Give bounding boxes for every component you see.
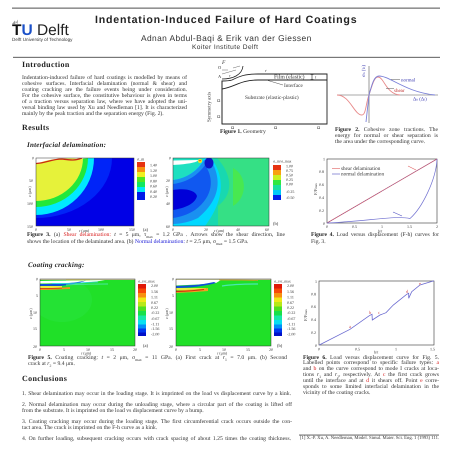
figure 6: load versus displacement chart (303, 279, 435, 354)
figure 5b: second crack contour: z (μm) (164, 308, 169, 319)
caption: figure 6 (303, 354, 439, 396)
figure 3b: normal delamination contour: 40 (166, 201, 170, 206)
figure 3a: shear delamination contour: 100 (98, 227, 104, 232)
title: Indentation-Induced Failure of Hard Coatings (95, 14, 357, 26)
text block: introduction: cohesive surfaces. Interfacial delamination (normal & shear) and (22, 81, 187, 87)
figure 5a: coating cracking contour: 20 (133, 347, 137, 352)
colorbar: figure 5b: 1.56 (287, 289, 294, 294)
colorbar: figure 5a: -1.11 (151, 322, 159, 326)
colorbar: figure 3a: 1.00 (150, 173, 157, 178)
figure 5b: second crack contour: 10 (169, 310, 173, 315)
figure 3b: normal delamination contour: 40 (236, 227, 240, 232)
figure 6: load versus displacement chart: b (369, 310, 372, 315)
figure 5a: coating cracking contour: (a) (143, 343, 148, 348)
figure 6: load versus displacement chart: 0.4 (311, 317, 316, 322)
caption: figure 4: Figure 4. Load versus displacement (F-h) curves for (311, 232, 439, 238)
figure 3a: shear delamination contour: z (μm) (27, 186, 32, 197)
colorbar: figure 3a: 0.20 (150, 194, 157, 199)
figure 5a: coating cracking contour: 10 (33, 310, 37, 315)
text block: conclusions: 1. Shear delamination may occur in the loading stage. It is imprinted on the load vs displacement curve by a kink. (22, 391, 291, 397)
figure 4: load versus displacement chart: 1 (323, 156, 325, 162)
caption: figure 5: crack at r2 = 9.4 μm. (28, 361, 75, 368)
caption: figure 1: Figure 1. Geometry (220, 129, 266, 135)
colorbar: figure 5a: 2.00 (151, 283, 158, 288)
colorbar: figure 3b: 0.75 (286, 168, 293, 173)
figure 3a: shear delamination contour: 150 (27, 224, 33, 229)
figure 2: cohesive zone tractions chart: Δn (Δt) (413, 96, 427, 102)
figure 3a: shear delamination contour: 0 (32, 156, 34, 160)
figure 3b: normal delamination contour: 60 (166, 224, 170, 229)
caption: figure 3 (27, 232, 285, 246)
figure 5a: coating cracking contour: 0 (36, 276, 38, 282)
figure 5a: coating cracking contour: r (μm) (81, 350, 92, 356)
figure 3b: normal delamination contour: 0 (169, 156, 171, 160)
figure 6: load versus displacement chart: 1.5 (430, 346, 435, 352)
figure 6: load versus displacement chart: d (406, 289, 409, 294)
colorbar: figure 3a: 0.60 (150, 184, 157, 188)
figure 3a: shear delamination contour: 50 (29, 178, 33, 183)
figure 6: load versus displacement chart: 0.5 (355, 346, 360, 352)
figure 6: load versus displacement chart: 0 (315, 343, 317, 348)
figure 5b: second crack contour: 20 (269, 347, 273, 352)
text block: introduction: For the cohesive surface, the constitutive behaviour is given in terms (22, 93, 187, 99)
text block: introduction: of a traction versus separation law, where we have adopted the uni- (22, 99, 187, 105)
caption: figure 6: tions r1 and r2, respectively. At c the first crack grows (303, 372, 439, 379)
figure 1: geometry: Ω (317, 125, 320, 130)
icon: TU Delft flame (12, 20, 18, 24)
caption: figure 6: Figure 6. Load versus displacement curve for Fig. 5. (303, 354, 439, 360)
caption: figure 3: Figure 3. (a) Shear delamination: t = 5 μm, τmax = 1.2 GPa . Arrows show the shear direction, line (27, 232, 285, 239)
caption: figure 4: Fig. 3. (311, 238, 326, 244)
figure 5b: second crack contour: 5 (172, 293, 174, 298)
figure 3b: normal delamination contour (164, 156, 279, 233)
figure 5b: second crack contour: (b) (277, 343, 283, 348)
reference: [1] X.-P. Xu, A. Needleman, Model. Simul. Mater. Sci. Eng. 1 (1993) 111. (300, 436, 439, 441)
colorbar: figure 5a: 0.67 (151, 300, 158, 305)
references rule (299, 434, 439, 436)
figure 4: load versus displacement chart: 1.5 (407, 224, 412, 229)
figure 6: load versus displacement chart: 1 (395, 346, 397, 352)
colorbar: figure 5b: 0.22 (287, 305, 294, 310)
figure 1: geometry: Interface (284, 83, 303, 89)
figure 6: load versus displacement chart: 0 (318, 346, 320, 352)
figure 3b: normal delamination contour: 20 (204, 227, 208, 232)
heading: Results: Results (22, 123, 49, 132)
caption: figure 2: Figure 2. Cohesive zone tractions. The (335, 126, 438, 132)
figure 4: load versus displacement chart: 0.2 (319, 208, 324, 213)
colorbar: figure 3a: 0.40 (150, 189, 157, 194)
figure 5b: second crack contour: 20 (169, 344, 173, 349)
figure 5a: coating cracking contour: 10 (86, 347, 90, 352)
colorbar: figure 5a: σ_r/σ_max (138, 280, 155, 284)
colorbar: figure 3a: σ_m (137, 156, 145, 162)
figure 4: load versus displacement chart: 2 (436, 224, 438, 229)
figure 1: geometry: Ω (217, 98, 221, 103)
colorbar: figure 3b (273, 160, 294, 200)
colorbar: figure 3a: 1.40 (150, 162, 157, 168)
figure 1: geometry: r (265, 68, 267, 73)
figure 1: geometry: Substrate (elastic-plastic) (245, 95, 299, 101)
text block: conclusions: 2. Normal delamination may occur during the unloading stage, where a circular part of the coating is lifted off (22, 402, 292, 408)
figure 6: load versus displacement chart: a (349, 324, 351, 329)
figure 1: geometry: t (315, 75, 317, 80)
caption: figure 4 (311, 232, 439, 244)
figure 3b: normal delamination contour: 0 (172, 227, 174, 232)
colorbar: figure 3a: 0.80 (150, 178, 157, 184)
figure 6: load versus displacement chart: 1 (315, 279, 317, 284)
figure 5a: coating cracking contour: 20 (33, 344, 37, 349)
colorbar: figure 5b: -1.56 (287, 326, 295, 331)
colorbar: figure 3b: 0.50 (286, 172, 293, 178)
figure 1: geometry: O (218, 65, 222, 70)
figure 5b: second crack contour: 10 (222, 347, 226, 352)
text block: conclusions: 3. Coating cracking may occur during the loading stage. The first circumferential crack occurs outside the con- (22, 418, 292, 424)
figure 6: load versus displacement chart: 0.6 (311, 304, 316, 309)
colorbar: figure 5a: -1.56 (151, 326, 159, 331)
figure 3a: shear delamination contour (27, 156, 148, 233)
figure 4: load versus displacement chart: F/Fmax (313, 183, 318, 195)
text block: introduction: mainly by the peak traction and the separation energy (Fig. 2). (22, 111, 164, 117)
colorbar: figure 5b: -1.11 (287, 322, 295, 326)
colorbar: figure 5b: -0.67 (287, 316, 295, 321)
figure 2: cohesive zone tractions chart: σn (τt) (361, 65, 367, 77)
figure 3a: shear delamination contour: 0 (35, 227, 37, 232)
colorbar: figure 3b: -0.50 (286, 195, 294, 200)
figure 5b: second crack contour (164, 276, 283, 356)
colorbar: figure 5a: -0.22 (151, 310, 159, 315)
figure 5a: coating cracking contour: 0 (39, 347, 41, 352)
figure 5b: second crack contour: 15 (169, 326, 173, 331)
colorbar: figure 5b: σ_r/σ_max (274, 280, 291, 284)
text block: conclusions: from the substrate. It is imprinted on the load vs displacement curve by a bump. (22, 408, 204, 414)
caption: figure 5 (28, 354, 287, 368)
figure 5a: coating cracking contour: 5 (36, 293, 38, 298)
figure 5a: coating cracking contour: z (μm) (28, 308, 33, 319)
colorbar: figure 5a (138, 280, 159, 336)
text block: conclusions: tact area. The crack is imprinted on the F-h curve as a kink. (22, 424, 157, 430)
text block: introduction: coating cracking are the failure events being under consideration. (22, 87, 187, 93)
figure 5a: coating cracking contour (28, 276, 148, 356)
caption: figure 6: and b on the curve correspond to mode I cracks at loca- (303, 366, 439, 372)
figure 6: load versus displacement chart: 0.8 (311, 292, 316, 296)
colorbar: figure 5b: -0.22 (287, 310, 295, 315)
colorbar: figure 5a: 1.56 (151, 289, 158, 294)
colorbar: figure 5a: 0.22 (151, 305, 158, 310)
figure 5a: coating cracking contour: 5 (63, 347, 65, 352)
figure 2: cohesive zone tractions chart (337, 65, 438, 123)
figure 1: geometry: A (218, 74, 222, 79)
colorbar: figure 5a: -0.67 (151, 316, 159, 321)
figure 2: cohesive zone tractions chart: shear (394, 88, 405, 94)
figure 1: geometry: Film (elastic) (274, 75, 305, 81)
figure 1: geometry: r (229, 73, 231, 78)
figure 4: load versus displacement chart: 0 (326, 224, 328, 229)
figure 5a: coating cracking contour: 15 (33, 326, 37, 331)
figure 3b: normal delamination contour: r (μm) (214, 228, 225, 233)
caption: figure 2 (335, 126, 438, 144)
figure 4: load versus displacement chart: 0.6 (319, 182, 324, 187)
figure 4: load versus displacement chart: h/t (378, 228, 383, 234)
colorbar: figure 5b: 0.67 (287, 300, 294, 305)
subheading: coating cracking: Coating cracking: (28, 261, 85, 269)
figure 3a: shear delamination contour: 150 (129, 227, 135, 232)
figure 2: cohesive zone tractions chart: normal (401, 78, 416, 84)
colorbar: figure 3b: 1.00 (286, 164, 293, 168)
figure 5a: coating cracking contour: 15 (110, 347, 114, 352)
caption: figure 3: shows the location of the delaminated area. (b) Normal delamination: t = 2.5 μm, σmax = 1.5 GPa. (27, 238, 248, 246)
institute: Koiter Institute Delft (192, 44, 258, 51)
figure 1: geometry: Ω (231, 125, 234, 130)
figure 1: geometry: Ω (274, 125, 277, 130)
caption: figure 6: Labelled points correspond to specific failure types: a (303, 360, 439, 366)
text block: conclusions (22, 391, 292, 442)
heading: Conclusions: Conclusions (22, 374, 67, 383)
caption: figure 5: Figure 5. Coating cracking: t = 2 μm, σmax = 11 GPa. (a) First crack at r1 = 7.0 μm. (b) Second (28, 354, 287, 362)
subheading: interfacial delamination: Interfacial delamination: (27, 141, 106, 149)
colorbar: figure 3b: 0.25 (286, 177, 293, 182)
figure 1: geometry: Symmetry axis (206, 92, 212, 122)
colorbar: figure 5b: 1.11 (287, 294, 294, 300)
caption: figure 2: energy for normal or shear separation is (335, 132, 438, 138)
figure 1: geometry: F (221, 60, 226, 66)
colorbar: figure 3a: 1.20 (150, 168, 157, 173)
colorbar: figure 5a: -2.00 (151, 332, 159, 336)
figure 5b: second crack contour: 0 (172, 276, 174, 282)
text block: conclusions: 4. On further loading, subsequent cracking occurs with crack spacing of about 1.25 times the coating thickness. (22, 436, 291, 442)
caption: figure 6: vicinity of the coating cracks. (303, 390, 370, 396)
figure 3a: shear delamination contour: 100 (27, 201, 33, 206)
figure 4: load versus displacement chart (313, 156, 438, 234)
colorbar: figure 5b: 2.00 (287, 283, 294, 288)
colorbar: figure 3b: -0.25 (286, 189, 294, 194)
figure 4: load versus displacement chart: 0.5 (352, 224, 357, 229)
figure 4: load versus displacement chart: shear delamination (341, 166, 381, 172)
figure 5b: second crack contour: 15 (246, 347, 250, 352)
colorbar: figure 5b: -2.00 (287, 332, 295, 336)
colorbar: figure 3b: σ_m/σ_max (273, 160, 292, 164)
caption: figure 2: the area under the corresponding curve. (335, 138, 425, 144)
figure 4: load versus displacement chart: 1 (381, 224, 383, 229)
figure 6: load versus displacement chart: c (378, 310, 380, 315)
figure 3a: shear delamination contour: (a) (143, 227, 148, 232)
figure 4: load versus displacement chart: 0.8 (319, 169, 324, 174)
figure 3b: normal delamination contour: 60 (265, 227, 269, 232)
colorbar: figure 3b: 0.00 (286, 182, 293, 186)
figure 6: load versus displacement chart: 0.2 (311, 330, 316, 335)
figure 5b: second crack contour: 0 (175, 347, 177, 352)
text block: introduction: versal binding law used by Xu and Needleman [1]. It is characterized (22, 105, 187, 111)
authors: Adnan Abdul-Baqi & Erik van der Giessen (141, 33, 312, 43)
figure 3a: shear delamination contour: 50 (67, 227, 71, 232)
figure 4: load versus displacement chart: normal delamination (341, 172, 384, 178)
figure 4: load versus displacement chart: 0 (323, 221, 325, 226)
figure 5b: second crack contour: r (μm) (217, 350, 228, 356)
colorbar: figure 5b (274, 280, 295, 336)
figure 3b: normal delamination contour: z (μm) (164, 186, 169, 197)
colorbar: figure 3a (137, 156, 157, 200)
caption: figure 6: sponds to some limited interfacial delamination in the (303, 384, 439, 390)
text block: introduction: Indentation-induced failure of hard coatings is modelled by means of (22, 75, 187, 81)
figure 3b: normal delamination contour: 20 (166, 178, 170, 183)
figure 3a: shear delamination contour: r (μm) (79, 228, 90, 233)
figure 5b: second crack contour: 5 (199, 347, 201, 352)
logo: TU Delft: TU Delft (12, 22, 69, 39)
figure 6: load versus displacement chart: F/Fmax (303, 309, 308, 321)
logo: TU Delft: Delft University of Technology (12, 37, 72, 42)
text block: introduction (22, 75, 188, 117)
heading: Introduction: Introduction (22, 60, 70, 69)
figure 1: geometry (206, 60, 327, 130)
figure 4: load versus displacement chart: 0.4 (319, 195, 324, 200)
figure 6: load versus displacement chart: e (419, 281, 421, 286)
colorbar: figure 5a: 1.11 (151, 294, 158, 300)
figure 6: load versus displacement chart: h/t (374, 350, 379, 354)
figure 1: geometry: Ω (217, 114, 221, 119)
figure 3b: normal delamination contour: (b) (273, 221, 279, 226)
caption: figure 6: until the interface and at d it shears off. Point e corre- (303, 378, 439, 384)
